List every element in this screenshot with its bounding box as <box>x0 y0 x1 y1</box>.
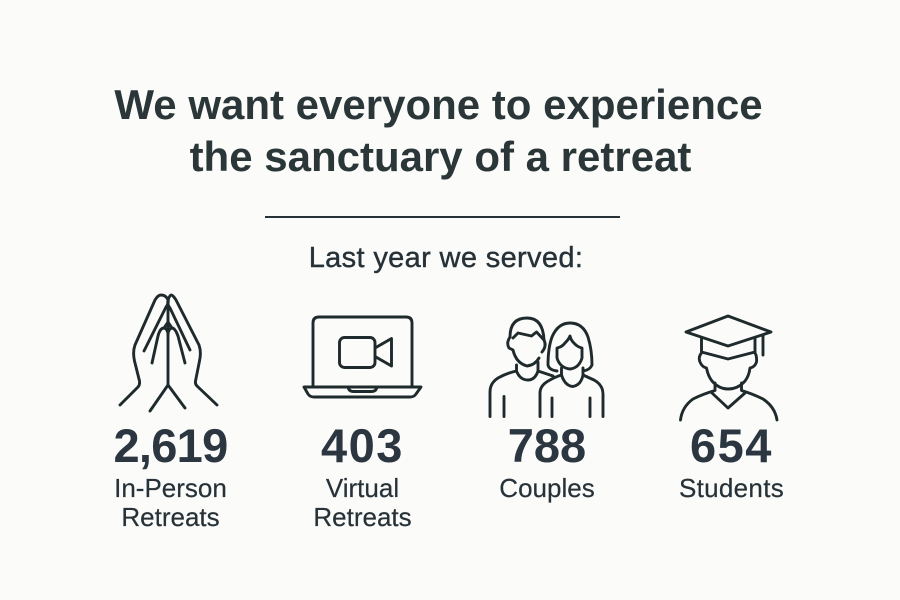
stat: virtual retreats <box>313 419 412 532</box>
icon: couple <box>490 318 603 416</box>
label: In-Person <box>114 473 227 503</box>
number: 2,619 <box>113 419 228 472</box>
number: 403 <box>321 419 404 472</box>
label: Retreats <box>313 502 412 532</box>
title <box>114 81 763 180</box>
stat: couples <box>499 419 595 503</box>
label <box>313 473 412 532</box>
number: 654 <box>690 419 773 472</box>
label: Students <box>679 473 784 503</box>
divider rule <box>265 216 620 218</box>
label: Couples <box>499 473 595 503</box>
subheading: Last year we served: <box>309 242 583 274</box>
stat: students <box>679 419 784 503</box>
label <box>114 473 227 532</box>
title: We want everyone to experience <box>114 81 763 128</box>
icon: graduate <box>680 316 777 420</box>
number: 788 <box>508 419 586 472</box>
title: the sanctuary of a retreat <box>190 133 691 180</box>
icon: laptop with video camera <box>304 317 421 397</box>
icon: praying hands <box>120 295 217 411</box>
label: Virtual <box>326 473 399 503</box>
stat: in-person retreats <box>113 419 228 532</box>
label: Retreats <box>121 502 220 532</box>
